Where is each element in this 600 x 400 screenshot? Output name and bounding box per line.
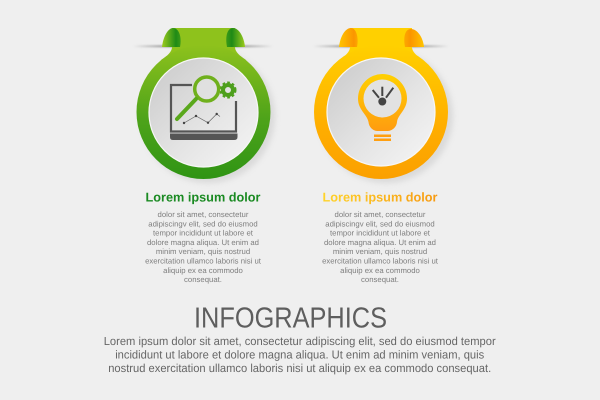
text block: left column: dolore magna aliqua. Ut enim ad [147, 238, 259, 247]
text block: summary: incididunt ut labore et dolore magna aliqua. Ut enim ad minim veniam, quis [115, 348, 484, 362]
text block: right column: tempor incididunt ut labore et [330, 229, 431, 238]
ring: green [136, 45, 270, 179]
heading: right column: Lorem ipsum dolor [322, 190, 438, 204]
disc: yellow badge [327, 58, 435, 166]
text block: right column [322, 210, 439, 284]
text block: right column: dolor sit amet, consectetur [335, 210, 426, 219]
disc: green badge [149, 58, 258, 167]
title: INFOGRAPHICS [194, 302, 387, 334]
badge: green analysis [133, 28, 275, 183]
text block: summary: Lorem ipsum dolor sit amet, consectetur adipiscing elit, sed do eiusmod tempor [104, 335, 496, 348]
text block: right column: dolore magna aliqua. Ut enim ad [324, 238, 436, 247]
text block: right column: adipiscingv elit, sed do eiusmod [325, 219, 435, 228]
heading: left column: Lorem ipsum dolor [146, 190, 261, 204]
ring: yellow [314, 45, 448, 179]
ribbon: yellow [339, 28, 424, 80]
icon: laptop with magnifier and gear [170, 77, 238, 140]
text block: left column: exercitation ullamco laboris nisi ut [145, 257, 262, 266]
text block: left column: aliquip ex ea commodo [163, 266, 243, 275]
text block: left column [145, 210, 262, 284]
text block: left column: adipiscingv elit, sed do eiusmod [148, 219, 258, 228]
text block: right column: exercitation ullamco laboris nisi ut [322, 257, 439, 266]
badge: yellow idea [313, 28, 453, 183]
icon: light bulb [358, 74, 407, 141]
text block: summary [104, 335, 496, 375]
text block: left column: tempor incididunt ut labore et [153, 229, 254, 238]
text block: right column: aliquip ex ea commodo [340, 266, 420, 275]
text block: left column: minim veniam, quis nostrud [156, 247, 250, 256]
text block: summary: nostrud exercitation ullamco laboris nisi ut aliquip ex ea commodo consequat. [108, 362, 491, 375]
ribbon: green [161, 28, 246, 80]
text block: left column: consequat. [184, 275, 222, 284]
text block: right column: consequat. [361, 275, 399, 284]
text block: right column: minim veniam, quis nostrud [333, 247, 427, 256]
text block: left column: dolor sit amet, consectetur [158, 210, 249, 219]
